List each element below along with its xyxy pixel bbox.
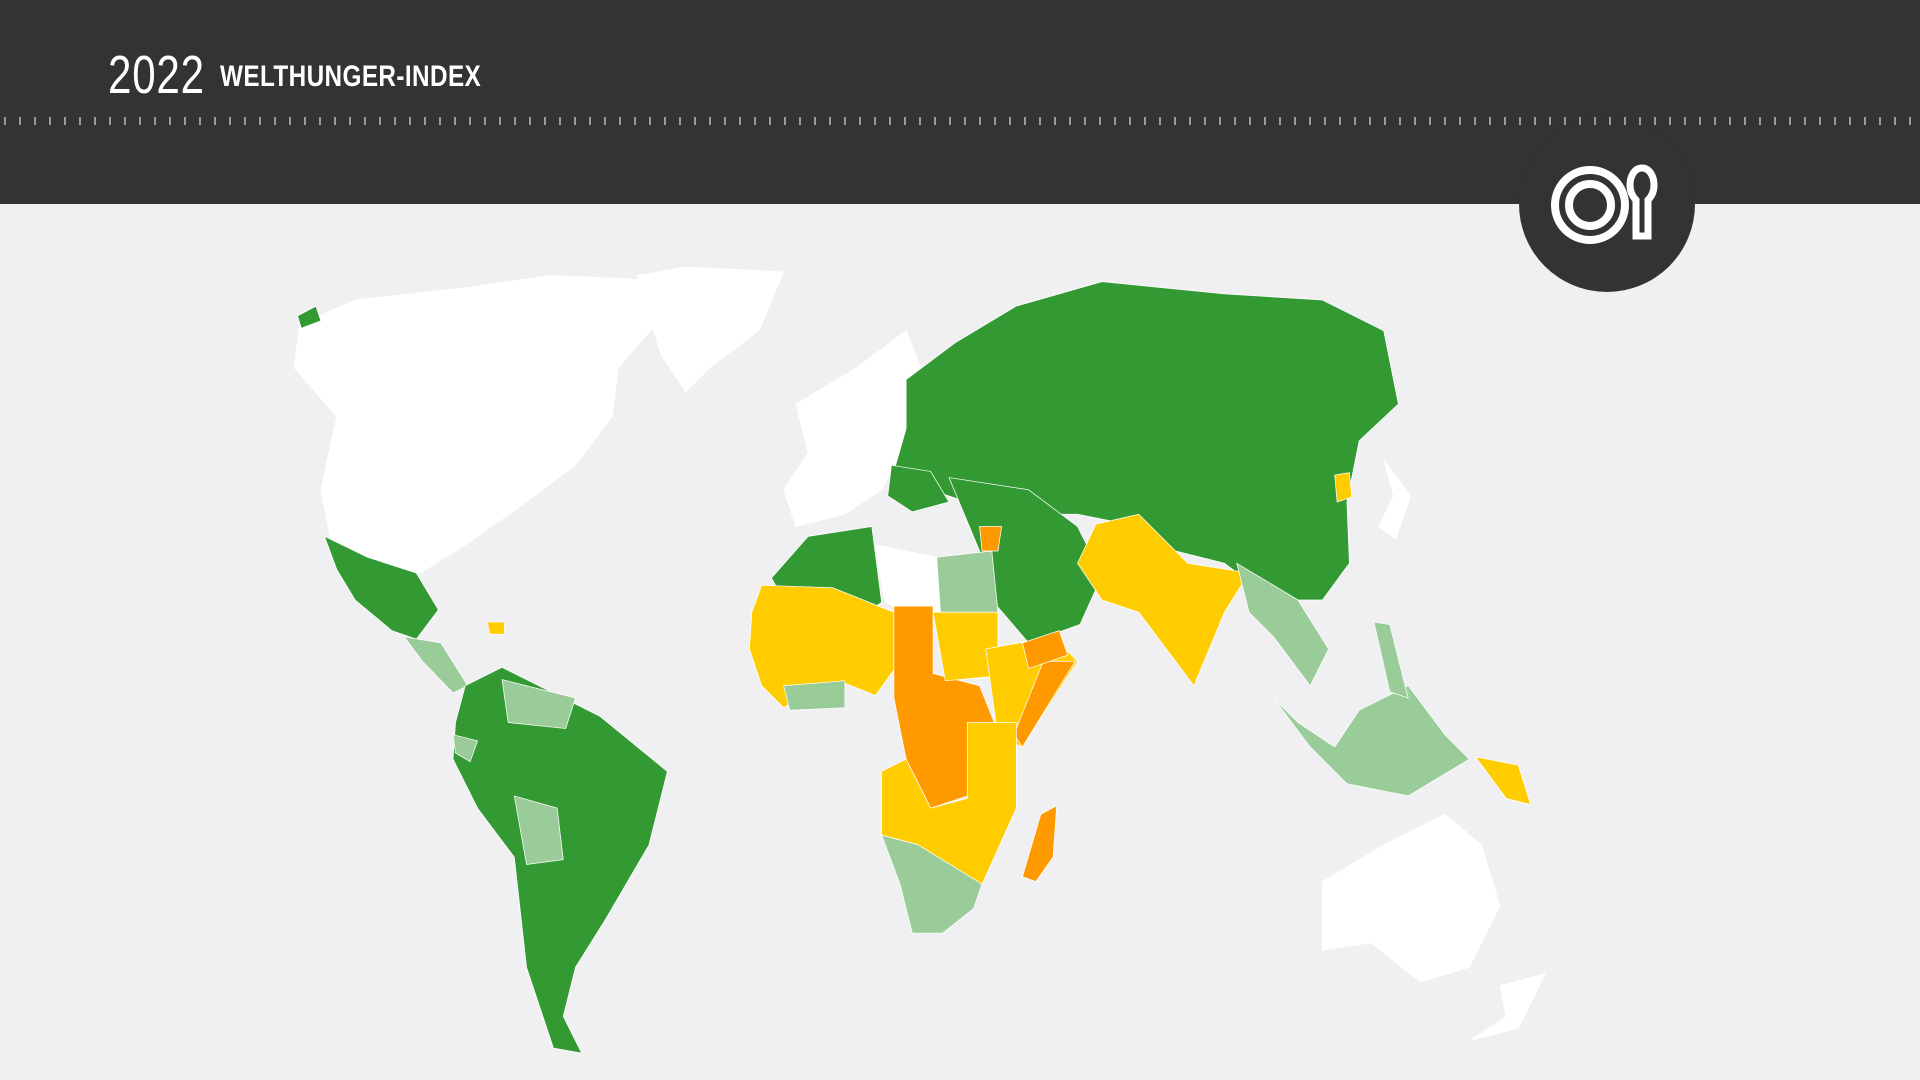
africa <box>771 527 882 627</box>
title year: 2022 <box>108 45 205 105</box>
icon: plate and spoon badge <box>1519 164 1695 292</box>
europe <box>784 331 931 527</box>
australia <box>1322 814 1500 982</box>
title text: WELTHUNGER-INDEX <box>220 60 481 93</box>
mexico <box>324 536 438 639</box>
south america <box>453 667 667 1053</box>
header band <box>0 0 1920 204</box>
north america <box>294 276 661 576</box>
tick ruler <box>4 117 1911 125</box>
russia china central asia <box>891 282 1398 600</box>
se asia <box>1237 563 1329 686</box>
india region <box>1078 514 1249 686</box>
